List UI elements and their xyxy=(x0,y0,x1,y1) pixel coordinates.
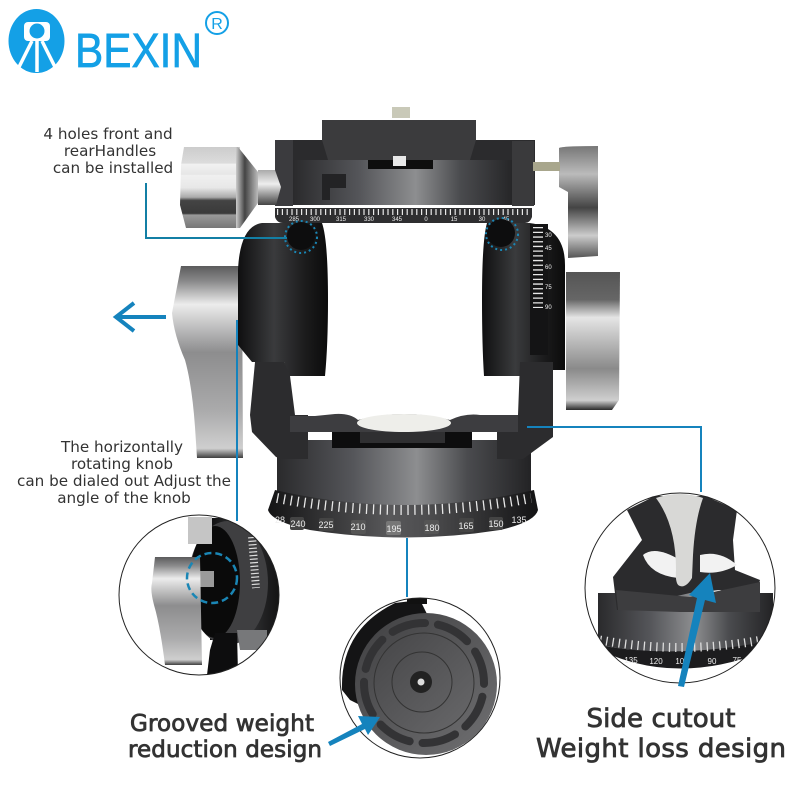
arrow: groove xyxy=(328,716,380,746)
white centre shape xyxy=(656,494,703,586)
top scale band: 315 xyxy=(336,217,347,223)
base recess xyxy=(332,432,472,448)
panel: knob detail circle xyxy=(119,515,290,675)
logo wordmark: BEXIN xyxy=(75,25,202,78)
knob neck xyxy=(258,170,281,205)
quick release plate xyxy=(322,120,476,160)
cutouts xyxy=(643,551,676,578)
text: handle holes: 4 holes front and xyxy=(43,125,173,143)
dashed highlight xyxy=(187,553,237,603)
circle outline xyxy=(119,515,279,675)
top scale band: 30 xyxy=(479,217,486,223)
text: handle holes: rearHandles xyxy=(64,142,156,160)
right lever handle xyxy=(566,272,620,410)
dial scale xyxy=(252,537,256,588)
center hole xyxy=(410,671,432,693)
leader line: side cutout xyxy=(527,427,701,492)
product: video head xyxy=(172,107,620,538)
dial labels: 225 xyxy=(318,520,334,530)
top scale band: 345 xyxy=(392,217,403,223)
text: side cutout design: Side cutout xyxy=(586,704,736,734)
callout: rotating knob xyxy=(17,320,237,521)
dial labels: 90 xyxy=(708,657,717,666)
dial labels: 180 xyxy=(424,523,440,533)
text: side cutout design: Weight loss design xyxy=(536,734,786,764)
registered mark: R xyxy=(211,16,223,33)
registered mark xyxy=(206,12,228,34)
weight-reduction grooves xyxy=(360,619,488,747)
callout: handle holes xyxy=(43,125,287,238)
left lever handle xyxy=(172,266,243,458)
underside disc xyxy=(355,613,497,755)
handle holes xyxy=(287,222,315,250)
top scale band: 285 xyxy=(289,217,300,223)
dial scale xyxy=(600,640,762,648)
text: grooved design xyxy=(128,711,322,763)
arrow: side cutout xyxy=(678,573,716,687)
right cylinder xyxy=(482,223,565,376)
dial labels xyxy=(625,657,741,664)
leader line: base xyxy=(406,538,408,597)
dial labels: 240 xyxy=(290,519,306,529)
left cylinder xyxy=(238,223,328,376)
panel: side cutout detail circle xyxy=(585,493,775,683)
dotted hole markers xyxy=(285,218,518,253)
black disk xyxy=(190,526,240,638)
right locking lever xyxy=(559,146,598,258)
text: rotating knob: can be dialed out Adjust the xyxy=(17,472,231,490)
shoulder xyxy=(616,582,760,612)
leader line: knob xyxy=(236,320,238,521)
axle xyxy=(200,571,214,587)
top scale band xyxy=(275,208,532,223)
left yoke arm xyxy=(250,362,308,459)
base ring xyxy=(277,440,531,506)
top clamp body xyxy=(275,140,535,205)
fork body xyxy=(613,496,760,610)
top scale band: 300 xyxy=(310,217,321,223)
dial labels xyxy=(275,515,527,535)
base top plate xyxy=(290,414,518,432)
lower bracket xyxy=(207,633,238,675)
text: rotating knob: angle of the knob xyxy=(57,489,191,507)
right yoke arm xyxy=(497,362,553,459)
dial labels: 28 xyxy=(275,515,285,525)
top scale band: 330 xyxy=(364,217,375,223)
side tilt scale: 90 xyxy=(545,305,552,311)
head body xyxy=(210,518,278,640)
dial labels: 75 xyxy=(733,656,742,665)
top scale band: 15 xyxy=(451,217,458,223)
text: rotating knob: The horizontally xyxy=(60,438,183,456)
dial band xyxy=(606,643,756,668)
dial labels: 165 xyxy=(458,521,474,531)
bubble level xyxy=(357,414,451,432)
locking screw xyxy=(533,162,560,171)
circle outline xyxy=(340,598,500,758)
grey ring xyxy=(188,521,268,645)
dial labels: 210 xyxy=(350,522,366,532)
mounting screw xyxy=(392,107,410,118)
dial labels: 135 xyxy=(624,656,638,665)
logo: BEXIN xyxy=(8,9,228,78)
dial labels: 120 xyxy=(649,657,663,666)
dial labels: 105 xyxy=(675,657,689,666)
side tilt scale: 45 xyxy=(545,246,552,252)
side tilt scale: 60 xyxy=(545,265,552,271)
lever xyxy=(151,557,202,665)
inner rings xyxy=(374,633,474,733)
leader line: holes xyxy=(146,183,287,238)
side tilt scale: 75 xyxy=(545,285,552,291)
icon: camera on tripod xyxy=(8,9,64,73)
panning dial xyxy=(268,490,538,538)
top scale band: 45 xyxy=(503,217,510,223)
top screw xyxy=(407,598,427,604)
dark shell xyxy=(342,602,426,704)
text: side cutout design xyxy=(536,704,786,764)
text: grooved design: reduction design xyxy=(128,737,322,763)
text: rotating knob: rotating knob xyxy=(71,455,173,473)
dial labels: 195 xyxy=(386,524,402,534)
text: handle holes xyxy=(43,125,173,177)
dial labels: 150 xyxy=(488,519,504,529)
top scale band: 0 xyxy=(424,217,428,223)
text: grooved design: Grooved weight xyxy=(130,711,314,737)
side tilt scale xyxy=(530,224,552,355)
left tilt knob xyxy=(180,147,258,228)
side tilt scale: 30 xyxy=(545,233,552,239)
ring body xyxy=(598,593,773,652)
upper metal block xyxy=(188,517,212,544)
text: rotating knob xyxy=(17,438,231,507)
text: handle holes: can be installed xyxy=(53,159,173,177)
circle outline xyxy=(585,493,775,683)
panel: underside detail circle xyxy=(340,597,500,758)
arrow: pull-out direction xyxy=(116,303,166,331)
dial labels: 135 xyxy=(511,515,527,525)
